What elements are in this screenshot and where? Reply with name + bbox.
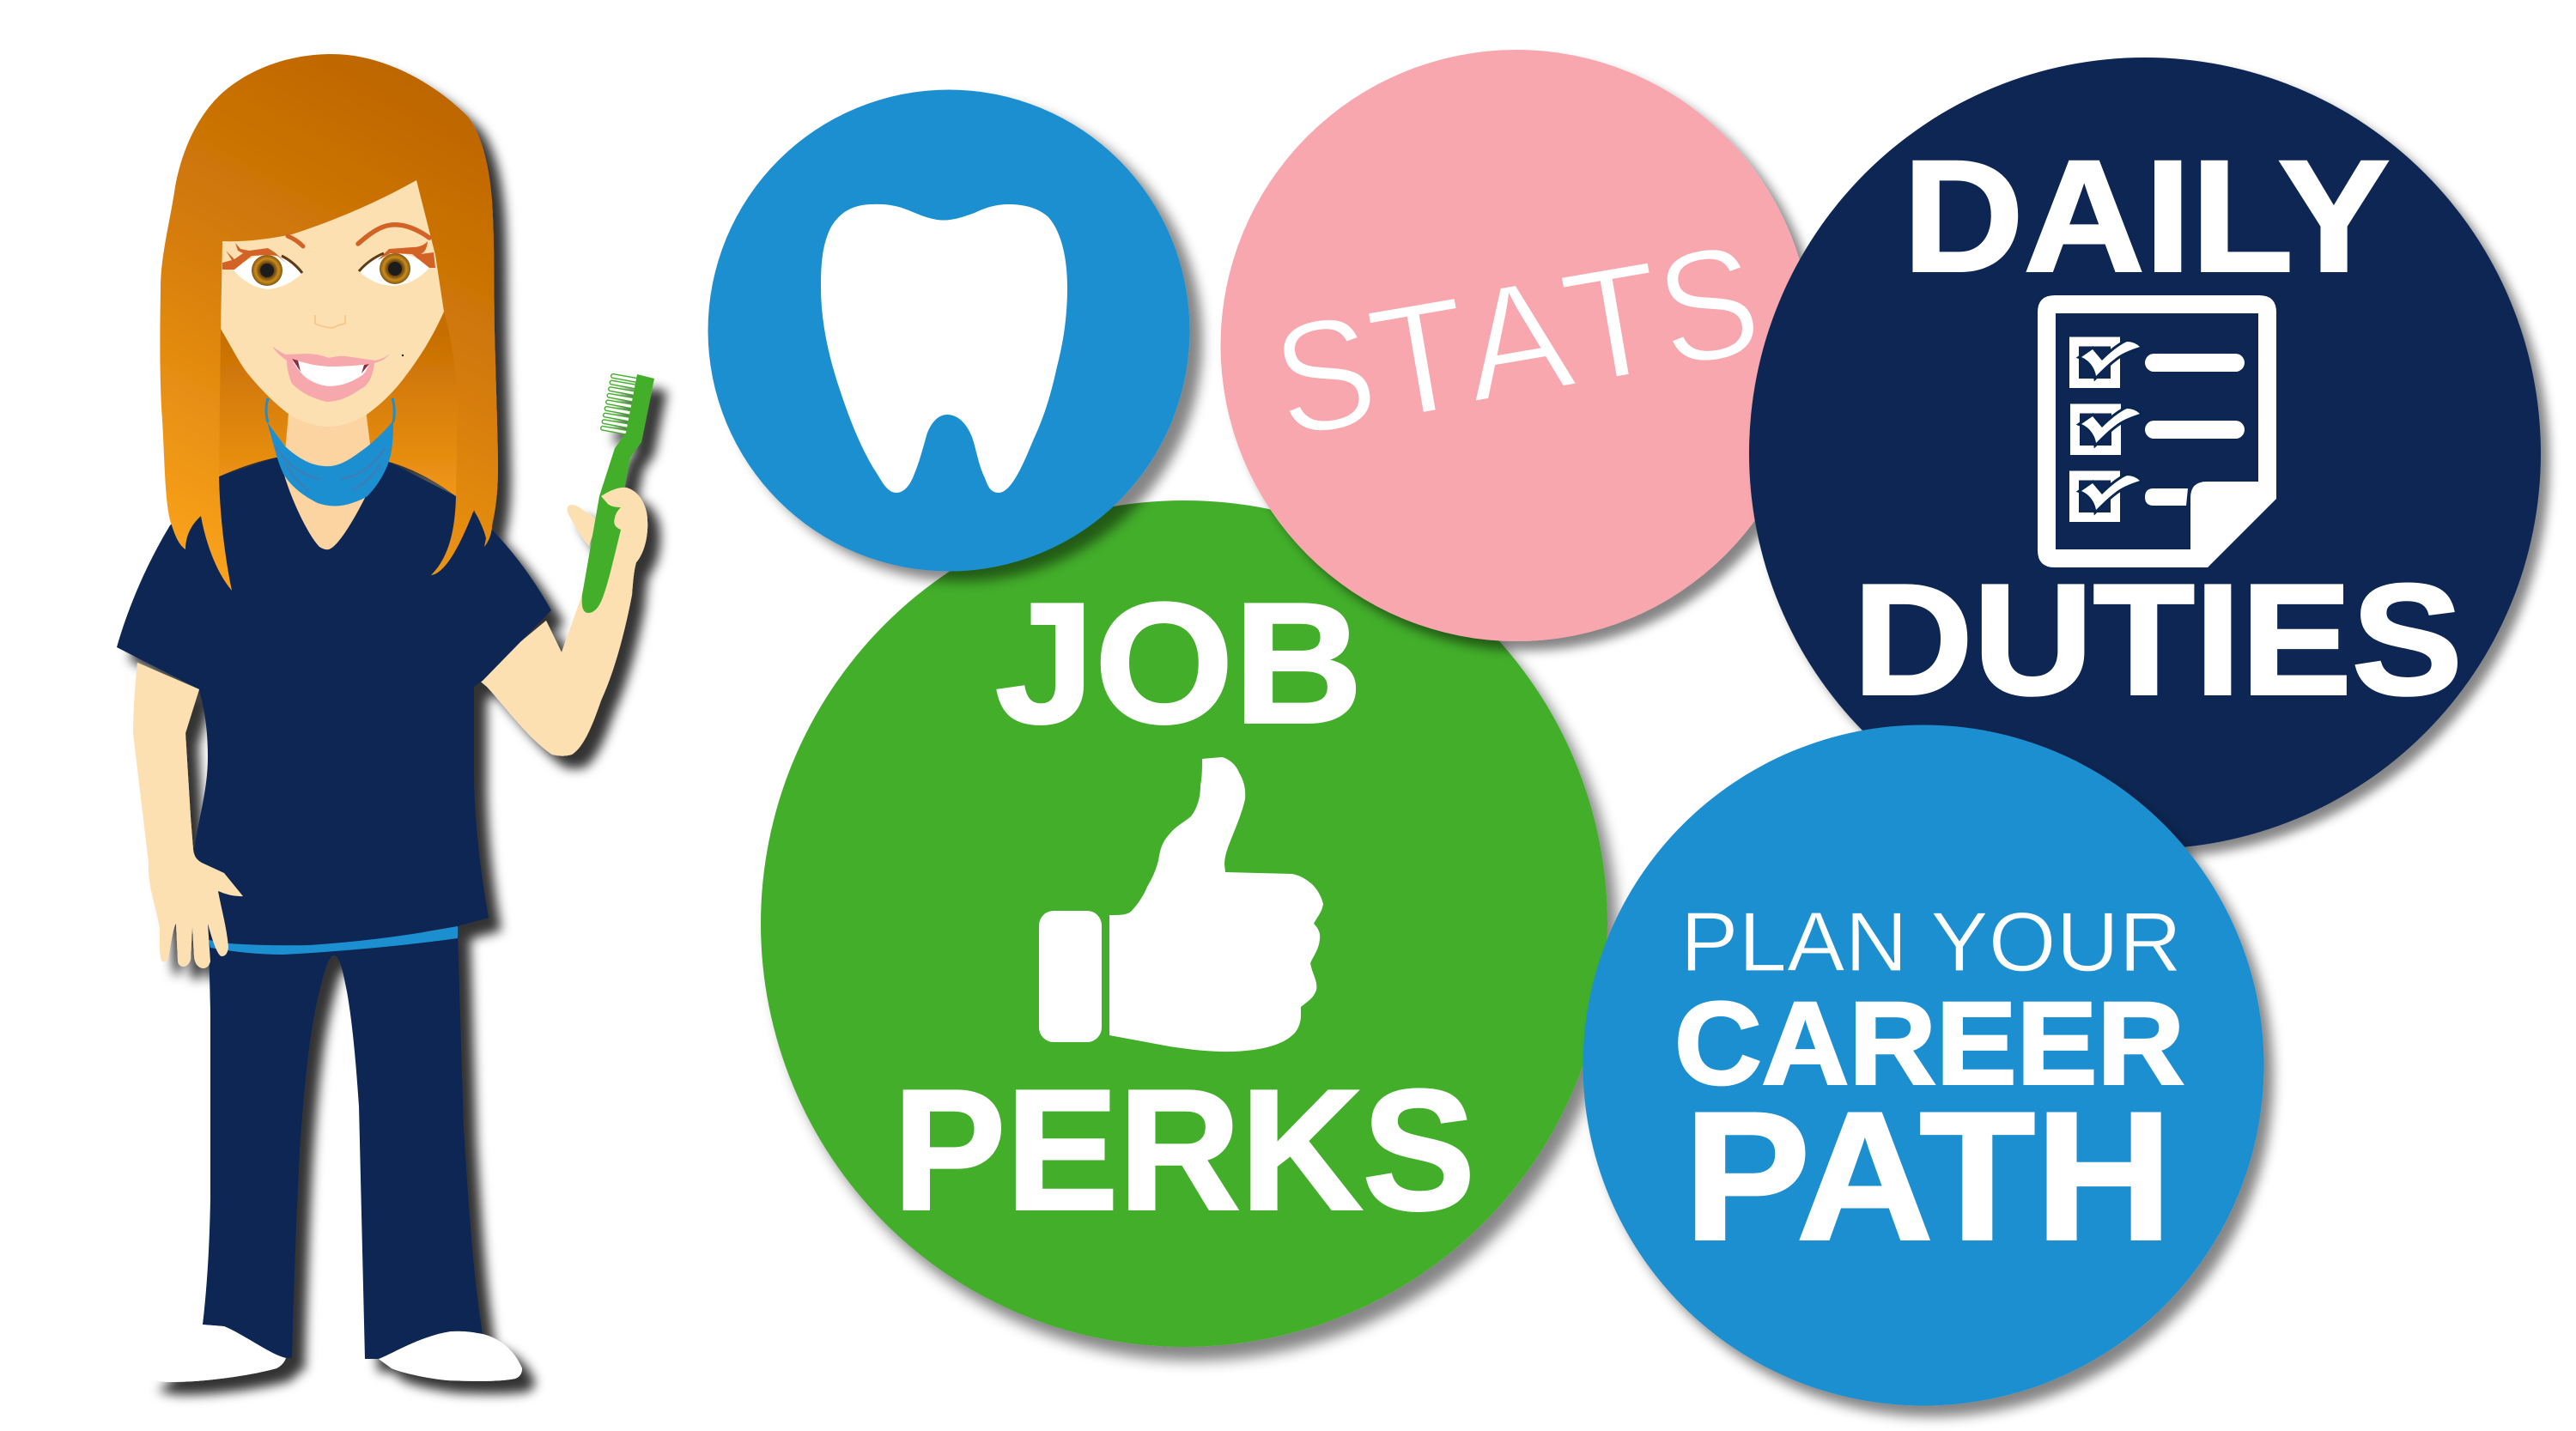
icon: checklist: [2038, 295, 2276, 567]
heading: duties: DUTIES: [1853, 551, 2463, 728]
left arm and hand: [133, 663, 243, 968]
right arm: [477, 488, 647, 756]
pants: [203, 931, 483, 1359]
hair: [160, 54, 498, 591]
circle: tooth: [708, 89, 1190, 572]
blue waist trim: [209, 926, 458, 955]
circle: daily duties: [1749, 58, 2541, 849]
inner hair shading: [219, 312, 458, 496]
thumb: [567, 505, 598, 546]
left eye: [222, 236, 303, 289]
beauty mark: [402, 355, 404, 356]
toothbrush: [582, 374, 654, 613]
heading: stats: T: [1358, 263, 1483, 453]
fingers: [601, 488, 647, 562]
circle: plan your career path: [1583, 725, 2263, 1406]
character: dental hygienist: [117, 54, 654, 1382]
circle: stats: [1221, 50, 1812, 641]
heading: path: PATH: [1684, 1075, 2172, 1279]
heading: job: JOB: [995, 568, 1363, 759]
heading: daily: DAILY: [1903, 129, 2390, 306]
heading: stats: S: [1261, 280, 1388, 470]
heading: stats: [1261, 209, 1771, 470]
circle: job perks: [761, 500, 1607, 1347]
heading: career: CAREER: [1674, 979, 2184, 1109]
heading: stats: S: [1645, 209, 1771, 400]
face mask: [266, 398, 394, 506]
heading: plan your: PLAN YOUR: [1680, 894, 2182, 989]
nose: [315, 315, 345, 328]
heading: stats: T: [1551, 227, 1676, 417]
right eye: [358, 225, 435, 286]
scrub top: [117, 458, 551, 947]
left shoe: [145, 1325, 286, 1382]
icon: thumbs up: [1039, 757, 1323, 1052]
mouth: [272, 346, 390, 402]
right shoe: [379, 1331, 522, 1381]
neck: [283, 403, 371, 549]
face: [221, 180, 444, 427]
heading: stats: A: [1449, 243, 1583, 435]
heading: perks: PERKS: [893, 1054, 1475, 1246]
icon: tooth: [821, 204, 1067, 493]
